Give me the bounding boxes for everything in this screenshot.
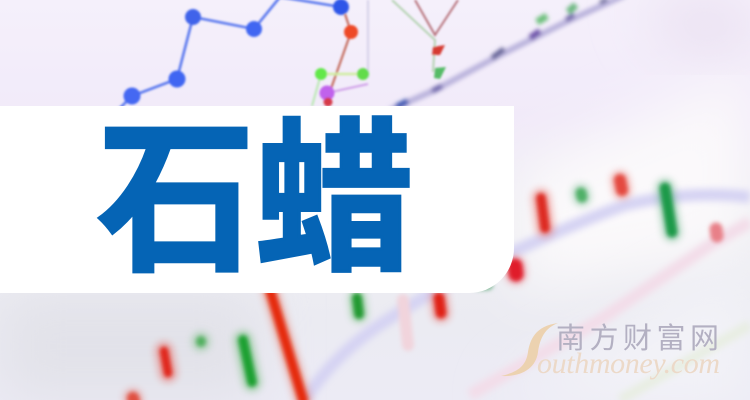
chart: candlestick halos	[133, 180, 672, 400]
chart: blurred candlesticks	[133, 180, 717, 400]
chart: rising diagonal trend band	[390, 0, 625, 110]
title: paraffin wax: 石蜡	[97, 108, 413, 292]
watermark: Chinese name: 南方财富网	[556, 322, 719, 355]
chart: blurred moving average bands	[305, 195, 750, 400]
icon: S swoosh	[501, 323, 558, 376]
watermark: domain: outhmoney.com	[537, 347, 720, 380]
chart: blue line with markers	[118, 0, 349, 110]
watermark: southmoney logo	[501, 322, 720, 380]
chart: red, green and purple lines with markers	[312, 0, 458, 106]
